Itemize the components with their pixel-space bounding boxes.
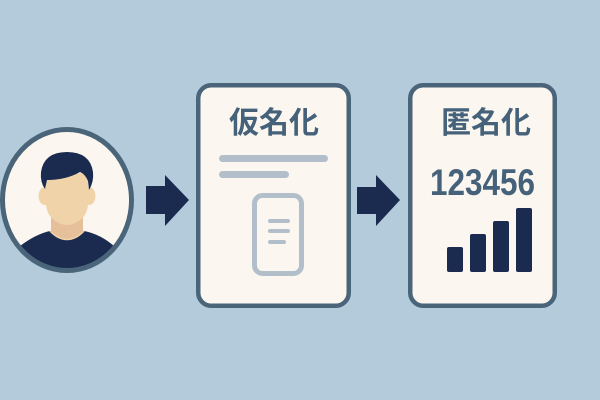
arrow: pseudonymization to anonymization — [357, 175, 400, 226]
number text: 123456 — [430, 162, 535, 203]
panel: anonymization — [410, 85, 555, 306]
heading: anonymization: 匿名化 — [441, 107, 531, 140]
arrow: person to pseudonymization — [146, 175, 189, 226]
bar chart — [447, 208, 532, 272]
icon: document — [254, 196, 302, 274]
icon: person portrait in oval — [2, 130, 132, 275]
heading: pseudonymization: 仮名化 — [229, 107, 319, 140]
panel: pseudonymization — [198, 85, 349, 306]
text line placeholders — [219, 155, 328, 178]
